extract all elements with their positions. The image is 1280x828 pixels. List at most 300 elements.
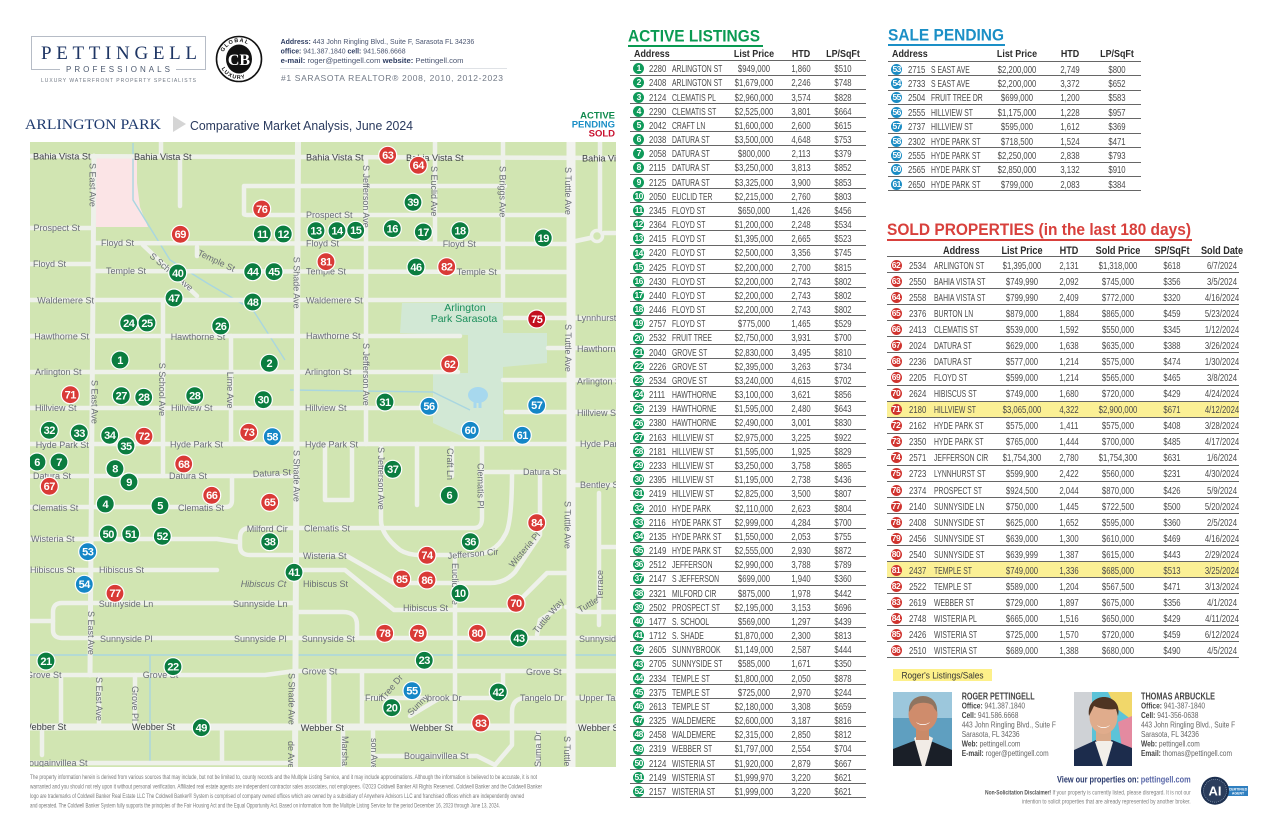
row 64: BAHIA VISTA ST bbox=[934, 292, 985, 304]
row 25: 2,480 bbox=[791, 403, 811, 415]
marker 82 bbox=[438, 258, 456, 276]
marker 51 bbox=[122, 525, 140, 543]
row 50: WISTERIA ST bbox=[672, 758, 715, 770]
row 34: 2135 bbox=[649, 531, 666, 543]
row 85: 85 bbox=[892, 629, 900, 639]
marker 62: 62 bbox=[444, 359, 456, 371]
row 11: 11 bbox=[635, 205, 643, 215]
horizontal street labels: Hibiscus Ct bbox=[241, 579, 287, 589]
horizontal street labels: Hillview St bbox=[305, 403, 347, 413]
row 86: 1,388 bbox=[1059, 645, 1078, 657]
marker 83 bbox=[472, 714, 490, 732]
badge: AI certified agent: CERTIFIED bbox=[1229, 788, 1248, 792]
horizontal street labels: Hyde Park St bbox=[36, 440, 89, 450]
row 58: HYDE PARK ST bbox=[931, 136, 980, 148]
row 83: $675,000 bbox=[1102, 597, 1134, 609]
row 80: $443 bbox=[1164, 549, 1181, 561]
row 27: $922 bbox=[834, 432, 851, 444]
row 32: $2,110,000 bbox=[735, 503, 773, 515]
row 41: 41 bbox=[634, 630, 643, 640]
main street labels: Webber St bbox=[301, 723, 344, 733]
row 55: $583 bbox=[1109, 92, 1126, 104]
marker 37 bbox=[384, 460, 402, 478]
row 51 bbox=[630, 770, 866, 784]
row 80: 1,387 bbox=[1059, 549, 1078, 561]
agent details: Thomas Arbuckle: Email: thomas@pettingell.com bbox=[1141, 748, 1232, 758]
marker 84 bbox=[528, 514, 546, 532]
row 27: HILLVIEW ST bbox=[672, 432, 714, 444]
row 13: $523 bbox=[834, 233, 851, 245]
marker 61 bbox=[513, 426, 531, 444]
row 71 highlighted: $671 bbox=[1164, 404, 1181, 416]
marker 77: 77 bbox=[109, 588, 121, 600]
row 72: $408 bbox=[1164, 420, 1181, 432]
horizontal street labels: Temple St bbox=[106, 266, 147, 276]
marker 33: 33 bbox=[74, 428, 85, 440]
row 78: 2/5/2024 bbox=[1207, 517, 1237, 529]
row 75: $231 bbox=[1164, 468, 1181, 480]
row 71 highlighted: 4,322 bbox=[1059, 404, 1078, 416]
row 35: HYDE PARK ST bbox=[672, 545, 722, 557]
marker 56 bbox=[420, 397, 438, 415]
row 29: 2233 bbox=[649, 460, 666, 472]
row 62: ARLINGTON ST bbox=[934, 260, 984, 272]
row 82: $471 bbox=[1164, 581, 1181, 593]
row 68: DATURA ST bbox=[934, 356, 972, 368]
row 75: 2723 bbox=[909, 468, 926, 480]
row 56: 1,228 bbox=[1060, 107, 1080, 119]
marker 4: 4 bbox=[102, 499, 109, 511]
row 1: $949,000 bbox=[738, 63, 770, 75]
row 82: 2522 bbox=[909, 581, 926, 593]
marker 85: 85 bbox=[396, 574, 408, 586]
contact details: office: 941.387.1840 cell: 941.586.6668 bbox=[281, 46, 406, 55]
row 20: 20 bbox=[634, 333, 643, 343]
commercial zone bbox=[96, 158, 148, 227]
horizontal street labels: Waldemere St bbox=[306, 296, 363, 306]
marker 21 bbox=[37, 652, 55, 670]
logo: Pettingell Professionals: LUXURY WATERFRONT PROPERTY SPECIALISTS bbox=[41, 78, 197, 84]
row 30: $436 bbox=[834, 474, 851, 486]
agent details: Thomas Arbuckle: Cell: 941-356-0638 bbox=[1141, 710, 1198, 720]
disclaimer under map: logo are trademarks of Coldwell Banker Real Estate LLC The Coldwell Banker® System is comprised of company owned offices which are owned by a subsidiary of Anywhere Advisors LLC and franchised offices which are independently owned bbox=[30, 792, 524, 800]
horizontal street labels: Hillview St bbox=[35, 403, 77, 413]
row 45: $244 bbox=[834, 687, 851, 699]
marker 38 bbox=[261, 533, 279, 551]
marker 31 bbox=[376, 393, 394, 411]
marker 6 west bbox=[28, 453, 46, 471]
logo: Global Luxury CB badge bbox=[216, 36, 262, 82]
logo: Global Luxury CB badge: LUXURY bbox=[222, 66, 244, 79]
row 24 bbox=[630, 387, 866, 402]
logo: Pettingell Professionals: PROFESSIONALS bbox=[66, 65, 170, 74]
row 21: GROVE ST bbox=[672, 347, 707, 359]
row 67: $635,000 bbox=[1102, 340, 1134, 352]
row 12: $534 bbox=[834, 219, 851, 231]
row 31: 3,500 bbox=[791, 488, 811, 500]
vertical street labels: S Euclid Ave bbox=[429, 166, 439, 216]
angled street labels: Tuttle Way bbox=[531, 596, 566, 635]
row 12: $1,200,000 bbox=[734, 219, 773, 231]
row 10: 2050 bbox=[649, 191, 666, 203]
marker 8 bbox=[106, 460, 124, 478]
row 69 bbox=[887, 370, 1239, 386]
row 36: $2,990,000 bbox=[734, 559, 773, 571]
row 19: 2757 bbox=[649, 318, 666, 330]
row 65: 1,884 bbox=[1059, 308, 1078, 320]
row 35: 2,930 bbox=[791, 545, 811, 557]
vertical street labels: S Tuttle Ave bbox=[562, 501, 572, 549]
row 69: $465 bbox=[1164, 372, 1181, 384]
marker 20 bbox=[383, 699, 401, 717]
row 65: $459 bbox=[1164, 308, 1181, 320]
row 81 highlighted: 3/25/2024 bbox=[1205, 565, 1239, 577]
row 41: 2,300 bbox=[791, 630, 811, 642]
row 22: 22 bbox=[634, 361, 643, 371]
row 41: $813 bbox=[834, 630, 851, 642]
park label bbox=[431, 302, 497, 325]
row 55: $699,000 bbox=[1001, 92, 1033, 104]
row 38: $442 bbox=[834, 588, 851, 600]
vertical street labels: S East Ave bbox=[86, 611, 96, 655]
row 23: $3,240,000 bbox=[734, 375, 773, 387]
row 3: $2,960,000 bbox=[734, 92, 773, 104]
horizontal street labels: Sunnyside St bbox=[302, 634, 355, 644]
row 78: $595,000 bbox=[1102, 517, 1134, 529]
row 62: 6/7/2024 bbox=[1207, 260, 1237, 272]
row 36: 3,788 bbox=[791, 559, 811, 571]
row 2: 2 bbox=[637, 77, 641, 87]
row 43: $585,000 bbox=[738, 658, 770, 670]
row 86: $490 bbox=[1164, 645, 1181, 657]
row 69: 3/8/2024 bbox=[1207, 372, 1237, 384]
row 21: 2040 bbox=[649, 347, 666, 359]
row 45: 45 bbox=[634, 687, 643, 697]
row 72: 72 bbox=[892, 420, 900, 430]
row 58: 1,524 bbox=[1060, 136, 1080, 148]
row 71 highlighted: $2,900,000 bbox=[1099, 404, 1137, 416]
marker 34 bbox=[101, 426, 119, 444]
marker 27: 27 bbox=[116, 391, 127, 403]
marker 53: 53 bbox=[82, 547, 94, 559]
row 34: HYDE PARK ST bbox=[672, 531, 722, 543]
row 61: 2,083 bbox=[1060, 179, 1080, 191]
horizontal street labels: Hawthorne St bbox=[171, 332, 226, 342]
marker 69: 69 bbox=[175, 229, 186, 241]
row 7: DATURA ST bbox=[672, 148, 710, 160]
row 65: $879,000 bbox=[1006, 308, 1038, 320]
row 5: 5 bbox=[637, 120, 641, 130]
row 82: $589,000 bbox=[1006, 581, 1038, 593]
horizontal street labels: Arlington St bbox=[35, 367, 82, 377]
row 78: SUNNYSIDE ST bbox=[934, 517, 984, 529]
vertical street labels: S Shade Ave bbox=[292, 257, 302, 309]
marker 35 bbox=[117, 437, 135, 455]
row 68 bbox=[887, 353, 1239, 370]
row 26: 3,001 bbox=[791, 417, 811, 429]
row 19: FLOYD ST bbox=[672, 318, 705, 330]
row 69: $565,000 bbox=[1102, 372, 1134, 384]
row 67: $629,000 bbox=[1006, 340, 1038, 352]
row 21: 21 bbox=[634, 347, 643, 357]
row 64: 2,409 bbox=[1059, 292, 1078, 304]
row 84 bbox=[887, 610, 1239, 626]
vertical street labels: Marsha bbox=[340, 736, 350, 766]
row 37: $699,000 bbox=[738, 573, 770, 585]
marker 28: 28 bbox=[138, 392, 150, 404]
row 9: 9 bbox=[637, 177, 641, 187]
row 62: 62 bbox=[892, 260, 900, 270]
marker 79: 79 bbox=[413, 628, 424, 640]
marker 23: 23 bbox=[419, 655, 430, 667]
row 6: 2038 bbox=[649, 134, 666, 146]
row 5: 2042 bbox=[649, 120, 666, 132]
row 80: 80 bbox=[892, 549, 900, 559]
row 46: $2,180,000 bbox=[734, 701, 773, 713]
row 49: $1,797,000 bbox=[734, 743, 773, 755]
row 5 bbox=[630, 118, 866, 132]
marker 41 bbox=[285, 563, 303, 581]
row 9: 2125 bbox=[649, 177, 666, 189]
agent details: Roger Pettingell: Web: pettingell.com bbox=[962, 739, 1020, 749]
vertical street labels: Suma Dr bbox=[533, 731, 543, 767]
row 58: 58 bbox=[892, 136, 901, 146]
table header bbox=[887, 243, 1239, 257]
main street labels: Bahia Vista St bbox=[306, 152, 364, 162]
table: sold properties bbox=[887, 245, 1243, 658]
disclaimer under map: and operated. The Coldwell Banker System fully supports the principles of the Fair Housing Act and the Equal Opportunity Act. Based on information from the Multiple Listing Service for the period December 16, 2023 through June 13, 2024. bbox=[30, 802, 500, 810]
row 22: $734 bbox=[834, 361, 851, 373]
marker 70 bbox=[507, 594, 525, 612]
vertical street labels: S Briggs Ave bbox=[498, 166, 508, 217]
row 70: 1,680 bbox=[1059, 388, 1078, 400]
park label: Arlington bbox=[444, 302, 486, 314]
row 17: FLOYD ST bbox=[672, 290, 705, 302]
row 81 highlighted: 1,336 bbox=[1059, 565, 1078, 577]
marker 54 bbox=[75, 575, 93, 593]
marker 13: 13 bbox=[310, 226, 322, 238]
marker 17: 17 bbox=[418, 227, 429, 239]
row 29: $865 bbox=[834, 460, 851, 472]
marker 63: 63 bbox=[382, 150, 394, 162]
row 4: 3,801 bbox=[791, 106, 811, 118]
row 66: $539,000 bbox=[1006, 324, 1038, 336]
row 49 bbox=[630, 742, 866, 756]
table header bbox=[888, 47, 1141, 62]
row 36: 36 bbox=[634, 559, 643, 569]
row 59: HYDE PARK ST bbox=[931, 150, 980, 162]
horizontal street labels: Clematis St bbox=[178, 503, 225, 513]
row 86: $689,000 bbox=[1006, 645, 1038, 657]
row 64: 64 bbox=[892, 292, 900, 302]
row 37: $360 bbox=[834, 573, 851, 585]
marker 8: 8 bbox=[112, 464, 118, 476]
row 74: $1,754,300 bbox=[1002, 452, 1041, 464]
row 39: $2,195,000 bbox=[734, 602, 773, 614]
marker 57 bbox=[528, 396, 546, 414]
row 61: 61 bbox=[892, 179, 901, 189]
row 32: $804 bbox=[834, 503, 851, 515]
row 55 bbox=[888, 91, 1141, 105]
horizontal street labels: Floyd St bbox=[33, 259, 67, 269]
row 44: TEMPLE ST bbox=[672, 673, 710, 685]
row 4 bbox=[630, 104, 866, 118]
row 49: WEBBER ST bbox=[672, 743, 712, 755]
row 43: 1,671 bbox=[791, 658, 811, 670]
main street labels: Webber St bbox=[410, 723, 454, 733]
row 77: SUNNYSIDE LN bbox=[934, 501, 984, 513]
row 81 highlighted: $749,000 bbox=[1006, 565, 1038, 577]
row 9: DATURA ST bbox=[672, 177, 710, 189]
main street labels bbox=[23, 152, 640, 733]
row 50: 2124 bbox=[649, 758, 666, 770]
row 74: 1/6/2024 bbox=[1207, 452, 1237, 464]
row 69: 1,214 bbox=[1059, 372, 1078, 384]
horizontal street labels: brook Dr bbox=[427, 693, 462, 703]
marker 24: 24 bbox=[123, 318, 136, 330]
row 24: 24 bbox=[634, 389, 643, 399]
row 55: FRUIT TREE DR bbox=[931, 92, 982, 104]
table header: HTD bbox=[1061, 48, 1079, 60]
row 10: 2,760 bbox=[791, 191, 811, 203]
row 44: 2,050 bbox=[791, 673, 811, 685]
row 52: 2157 bbox=[649, 786, 666, 798]
row 33: 33 bbox=[634, 517, 643, 527]
row 82: 82 bbox=[892, 581, 900, 591]
row 58: $718,500 bbox=[1001, 136, 1033, 148]
row 77 bbox=[887, 498, 1239, 514]
marker 30: 30 bbox=[258, 395, 269, 407]
photo: Thomas Arbuckle bbox=[1074, 692, 1132, 766]
non-solicitation disclaimer bbox=[985, 790, 1191, 805]
row 75: $560,000 bbox=[1102, 468, 1134, 480]
agent details: Roger Pettingell: Cell: 941.586.6668 bbox=[962, 710, 1018, 720]
horizontal street labels: Sunnyside Pl bbox=[100, 634, 153, 644]
row 49: 2319 bbox=[649, 743, 666, 755]
row 85 bbox=[887, 626, 1239, 642]
row 9: $3,325,000 bbox=[734, 177, 773, 189]
row 50 bbox=[630, 756, 866, 770]
table: sale pending bbox=[888, 48, 1141, 191]
row 47 bbox=[630, 713, 866, 727]
row 15: 2,700 bbox=[791, 262, 811, 274]
row 28: $1,595,000 bbox=[734, 446, 773, 458]
row 11: FLOYD ST bbox=[672, 205, 705, 217]
vertical street labels: S East Ave bbox=[88, 163, 98, 207]
row 67: 2024 bbox=[909, 340, 926, 352]
marker 65: 65 bbox=[264, 497, 276, 509]
vertical street labels: Clematis Pl bbox=[476, 463, 486, 509]
horizontal street labels: Prospect St bbox=[306, 210, 353, 220]
row 18: 2,743 bbox=[791, 304, 811, 316]
row 66: 66 bbox=[892, 324, 900, 334]
row 71 highlighted: 4/12/2024 bbox=[1205, 404, 1239, 416]
row 56 bbox=[888, 105, 1141, 119]
row 66: 1/12/2024 bbox=[1205, 324, 1239, 336]
row 29 bbox=[630, 458, 866, 472]
agent details: Thomas Arbuckle: THOMAS ARBUCKLE bbox=[1141, 690, 1215, 702]
row 48 bbox=[630, 727, 866, 742]
row 55: 55 bbox=[892, 92, 901, 102]
row 43: 2705 bbox=[649, 658, 666, 670]
row 34 bbox=[630, 529, 866, 543]
marker 47: 47 bbox=[168, 293, 180, 305]
row 48: 2458 bbox=[649, 729, 666, 741]
row 38: $875,000 bbox=[738, 588, 770, 600]
row 6 bbox=[630, 132, 866, 146]
badge: AI certified agent: AI bbox=[1208, 784, 1222, 798]
row 19: 1,465 bbox=[791, 318, 811, 330]
row 64: 2558 bbox=[909, 292, 926, 304]
marker 63 bbox=[379, 146, 397, 164]
row 11 bbox=[630, 203, 866, 217]
row 30: 2,738 bbox=[791, 474, 811, 486]
main street labels: Bahia Vista St bbox=[134, 152, 192, 162]
row 68: $474 bbox=[1164, 356, 1181, 368]
row 79: $469 bbox=[1164, 533, 1181, 545]
marker 76: 76 bbox=[256, 204, 268, 216]
row 61: $799,000 bbox=[1001, 179, 1033, 191]
horizontal street labels: Fruit bbox=[365, 693, 383, 703]
horizontal street labels: Hibiscus St bbox=[403, 603, 449, 613]
row 68: 1/30/2024 bbox=[1205, 356, 1239, 368]
row 41: 1712 bbox=[649, 630, 666, 642]
row 74: 74 bbox=[892, 452, 900, 462]
marker 15: 15 bbox=[350, 225, 362, 237]
row 65: BURTON LN bbox=[934, 308, 973, 320]
row 26 bbox=[630, 416, 866, 430]
row 58: 2302 bbox=[908, 136, 925, 148]
marker 74: 74 bbox=[421, 550, 434, 562]
marker 1 bbox=[111, 351, 129, 369]
row 26: 2380 bbox=[649, 417, 666, 429]
row 72: $575,000 bbox=[1102, 420, 1134, 432]
row 11: 1,426 bbox=[791, 205, 811, 217]
row 71 highlighted: 2180 bbox=[909, 404, 926, 416]
row 24: $856 bbox=[834, 389, 851, 401]
row 17: 17 bbox=[634, 290, 643, 300]
marker 64 bbox=[409, 156, 427, 174]
disclaimer under map: The property information herein is derived from various sources that may include, but not be limited to, county records and the Multiple Listing Service, and it may include approximations. Although the information is believed to be accurate, it is not bbox=[30, 774, 537, 781]
row 70: 70 bbox=[892, 388, 900, 398]
marker 62 bbox=[441, 355, 459, 373]
row 38: 38 bbox=[634, 588, 643, 598]
heading: sale pending: SALE PENDING bbox=[888, 26, 1004, 44]
marker 69 bbox=[171, 225, 189, 243]
row 20: $2,750,000 bbox=[734, 332, 773, 344]
table header: Sold Price bbox=[1096, 245, 1140, 257]
marker 82: 82 bbox=[441, 262, 453, 274]
row 20: FRUIT TREE bbox=[672, 332, 712, 344]
row 14 bbox=[630, 246, 866, 260]
row 52: 3,220 bbox=[791, 786, 811, 798]
row 60 bbox=[888, 163, 1141, 177]
row 76: PROSPECT ST bbox=[934, 485, 982, 497]
horizontal street labels: Clematis St bbox=[304, 524, 351, 534]
row 61: HYDE PARK ST bbox=[931, 179, 980, 191]
row 80: $639,999 bbox=[1006, 549, 1038, 561]
row 14: 3,356 bbox=[791, 247, 811, 259]
row 84: WISTERIA PL bbox=[934, 613, 977, 625]
row 4: 4 bbox=[637, 106, 641, 116]
row 37: 1,940 bbox=[791, 573, 811, 585]
marker 12: 12 bbox=[278, 229, 289, 241]
row 53: $2,200,000 bbox=[998, 64, 1036, 76]
row 28: 2181 bbox=[649, 446, 666, 458]
row 16: 16 bbox=[634, 276, 643, 286]
horizontal street labels: Floyd St bbox=[443, 239, 476, 249]
row 76 bbox=[887, 482, 1239, 498]
